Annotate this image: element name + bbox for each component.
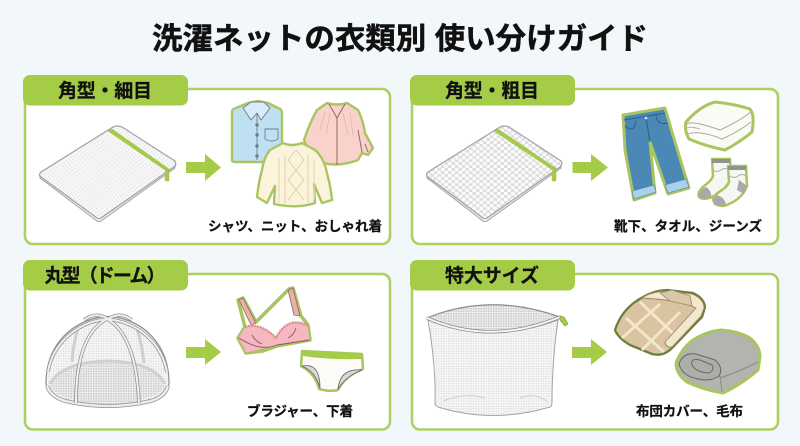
icon: large mesh bag [427,305,568,416]
icon: jeans [623,108,689,200]
panel: dome [23,260,390,430]
panel frame [25,274,390,430]
icon: dome net [46,315,169,406]
caption: 布団カバー、毛布 [636,403,743,419]
heading tab: 角型・粗目 [445,80,539,102]
panel frame [25,89,390,244]
heading tab: 角型・細目 [58,80,152,102]
panel: extra large [410,260,778,430]
icon: fine mesh bag [40,126,176,222]
heading tab: 丸型（ドーム） [44,265,166,287]
icon: blouse [304,103,373,165]
caption: ブラジャー、下着 [247,403,353,419]
icon: coarse mesh bag [426,126,562,222]
heading tab [23,75,188,106]
panel frame [412,274,778,430]
icon: knit sweater [257,143,332,206]
panel frame [412,89,778,244]
icon: rolled blanket [676,330,760,393]
arrow [572,339,607,365]
heading tab [410,75,575,106]
caption: シャツ、ニット、おしゃれ着 [208,219,382,234]
panel: square fine mesh [23,75,390,244]
icon: underwear [301,350,363,391]
icon: socks [699,159,747,206]
arrow [572,154,608,181]
heading tab [410,260,575,290]
arrow [186,154,221,181]
icon: shirt [232,101,282,162]
title: 洗濯ネットの衣類別 使い分けガイド [152,23,648,56]
icon: folded towels [685,102,753,150]
panel: square coarse mesh [410,75,778,244]
arrow [186,339,221,365]
heading tab [23,260,188,290]
caption: 靴下、タオル、ジーンズ [614,218,762,234]
icon: bra [238,288,310,353]
icon: folded futon [615,290,705,355]
heading tab: 特大サイズ [445,264,539,287]
